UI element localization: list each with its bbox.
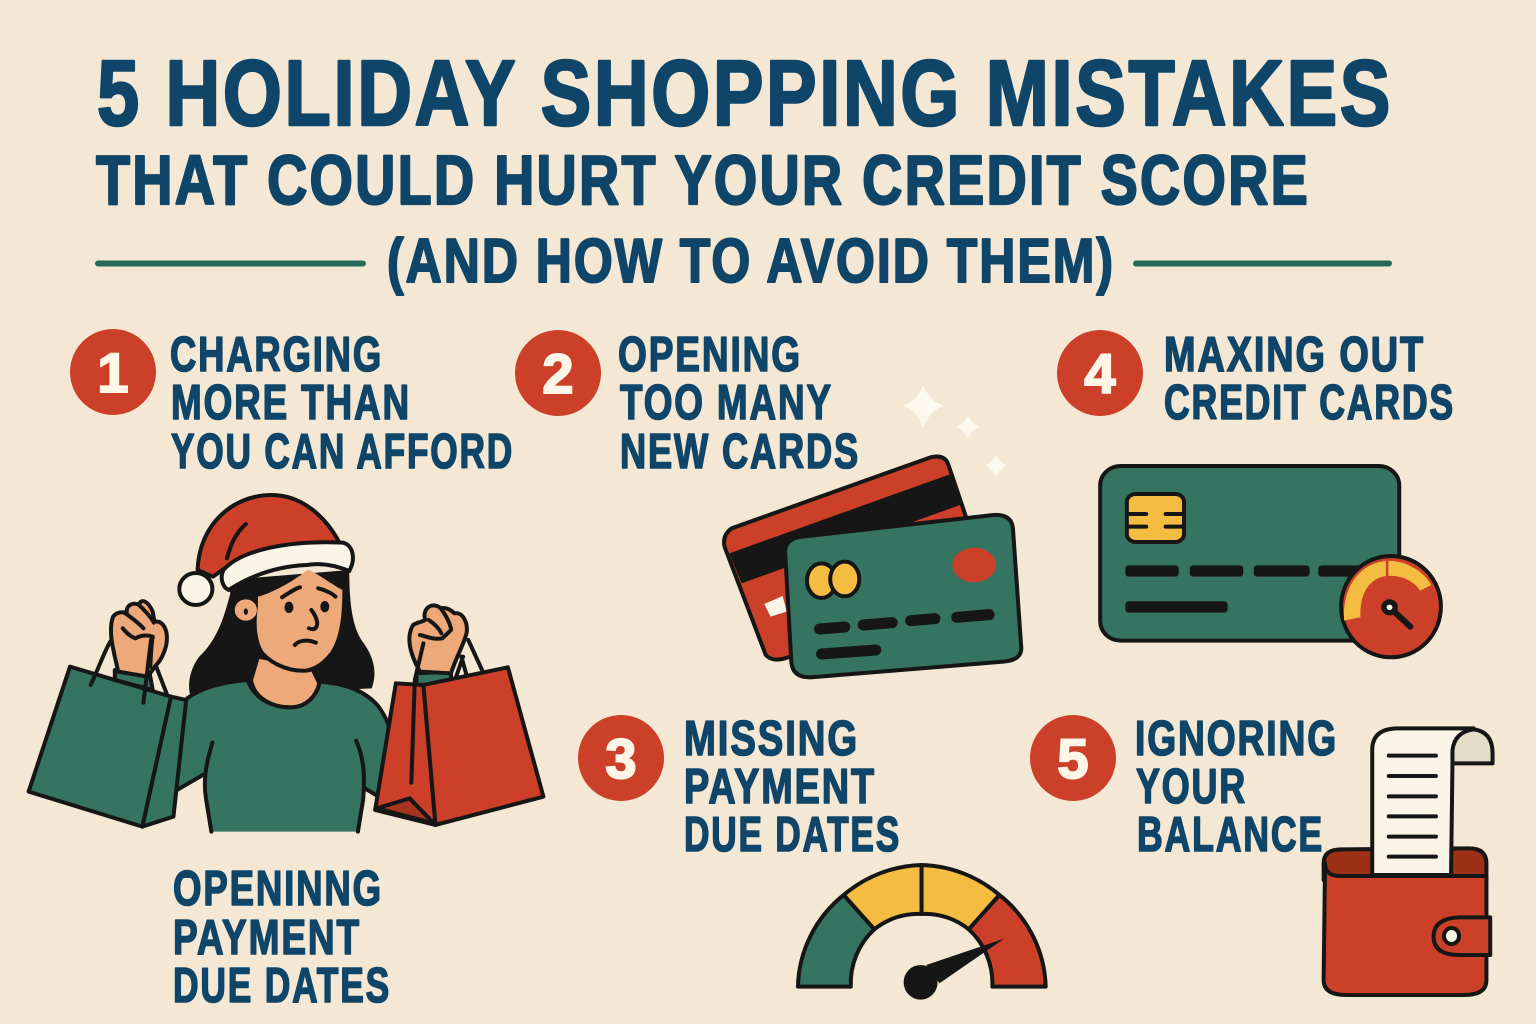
number badge 5: 5 xyxy=(1057,727,1089,790)
icon: sparkles xyxy=(903,385,1007,477)
item 3 text: PAYMENT xyxy=(684,760,876,814)
number badge 4: 4 xyxy=(1084,342,1116,405)
item 2 text xyxy=(618,328,860,479)
number badge 2 xyxy=(515,330,601,416)
green card front xyxy=(785,515,1021,677)
item 1 text: YOU CAN AFFORD xyxy=(171,425,514,479)
item 5 text: IGNORING xyxy=(1135,712,1338,766)
item 1 heading xyxy=(70,328,514,479)
item 3 text xyxy=(684,712,901,862)
title block xyxy=(96,41,1393,296)
icon: worried shopper with bags xyxy=(29,495,543,832)
title line 3: (AND HOW TO AVOID THEM) xyxy=(387,227,1115,296)
item 3 text: DUE DATES xyxy=(684,808,901,862)
item 4 text: MAXING OUT xyxy=(1164,328,1425,382)
item 1 text xyxy=(170,328,514,479)
item 4 text xyxy=(1164,328,1455,430)
caption under shopper xyxy=(173,862,391,1013)
item 3 text: MISSING xyxy=(684,712,859,766)
item 2 text: NEW CARDS xyxy=(620,425,860,479)
number badge 3: 3 xyxy=(605,727,637,790)
item 2 text: TOO MANY xyxy=(620,376,833,430)
item 2 heading xyxy=(515,328,860,479)
number badge 3 xyxy=(578,715,664,801)
item 5 text xyxy=(1135,712,1338,862)
icon: two credit cards with sparkles xyxy=(724,385,1021,677)
item 3 heading xyxy=(578,712,901,862)
icon: small gauge xyxy=(1341,556,1441,657)
item 1 text: CHARGING xyxy=(170,328,383,382)
item 1 text: MORE THAN xyxy=(171,376,411,430)
number badge 1: 1 xyxy=(97,341,129,404)
number badge 4 xyxy=(1057,330,1143,416)
icon: card chip xyxy=(1127,494,1184,542)
icon: wallet with receipt xyxy=(1324,728,1493,995)
icon: credit score meter xyxy=(798,865,1046,1000)
caption under shopper: DUE DATES xyxy=(173,959,391,1013)
item 4 heading xyxy=(1057,328,1455,430)
item 2 text: OPENING xyxy=(618,328,802,382)
number badge 5 xyxy=(1030,715,1116,801)
icon: credit card with utilization gauge xyxy=(1100,466,1441,657)
caption under shopper: PAYMENT xyxy=(173,911,361,965)
red card back xyxy=(724,457,966,660)
number badge 2: 2 xyxy=(542,342,574,405)
caption under shopper: OPENINNG xyxy=(173,862,383,916)
number badge 1 xyxy=(70,329,156,415)
item 5 heading xyxy=(1030,712,1338,862)
icon: receipt xyxy=(1372,728,1493,875)
item 5 text: BALANCE xyxy=(1137,808,1324,862)
item 5 text: YOUR xyxy=(1136,760,1247,814)
